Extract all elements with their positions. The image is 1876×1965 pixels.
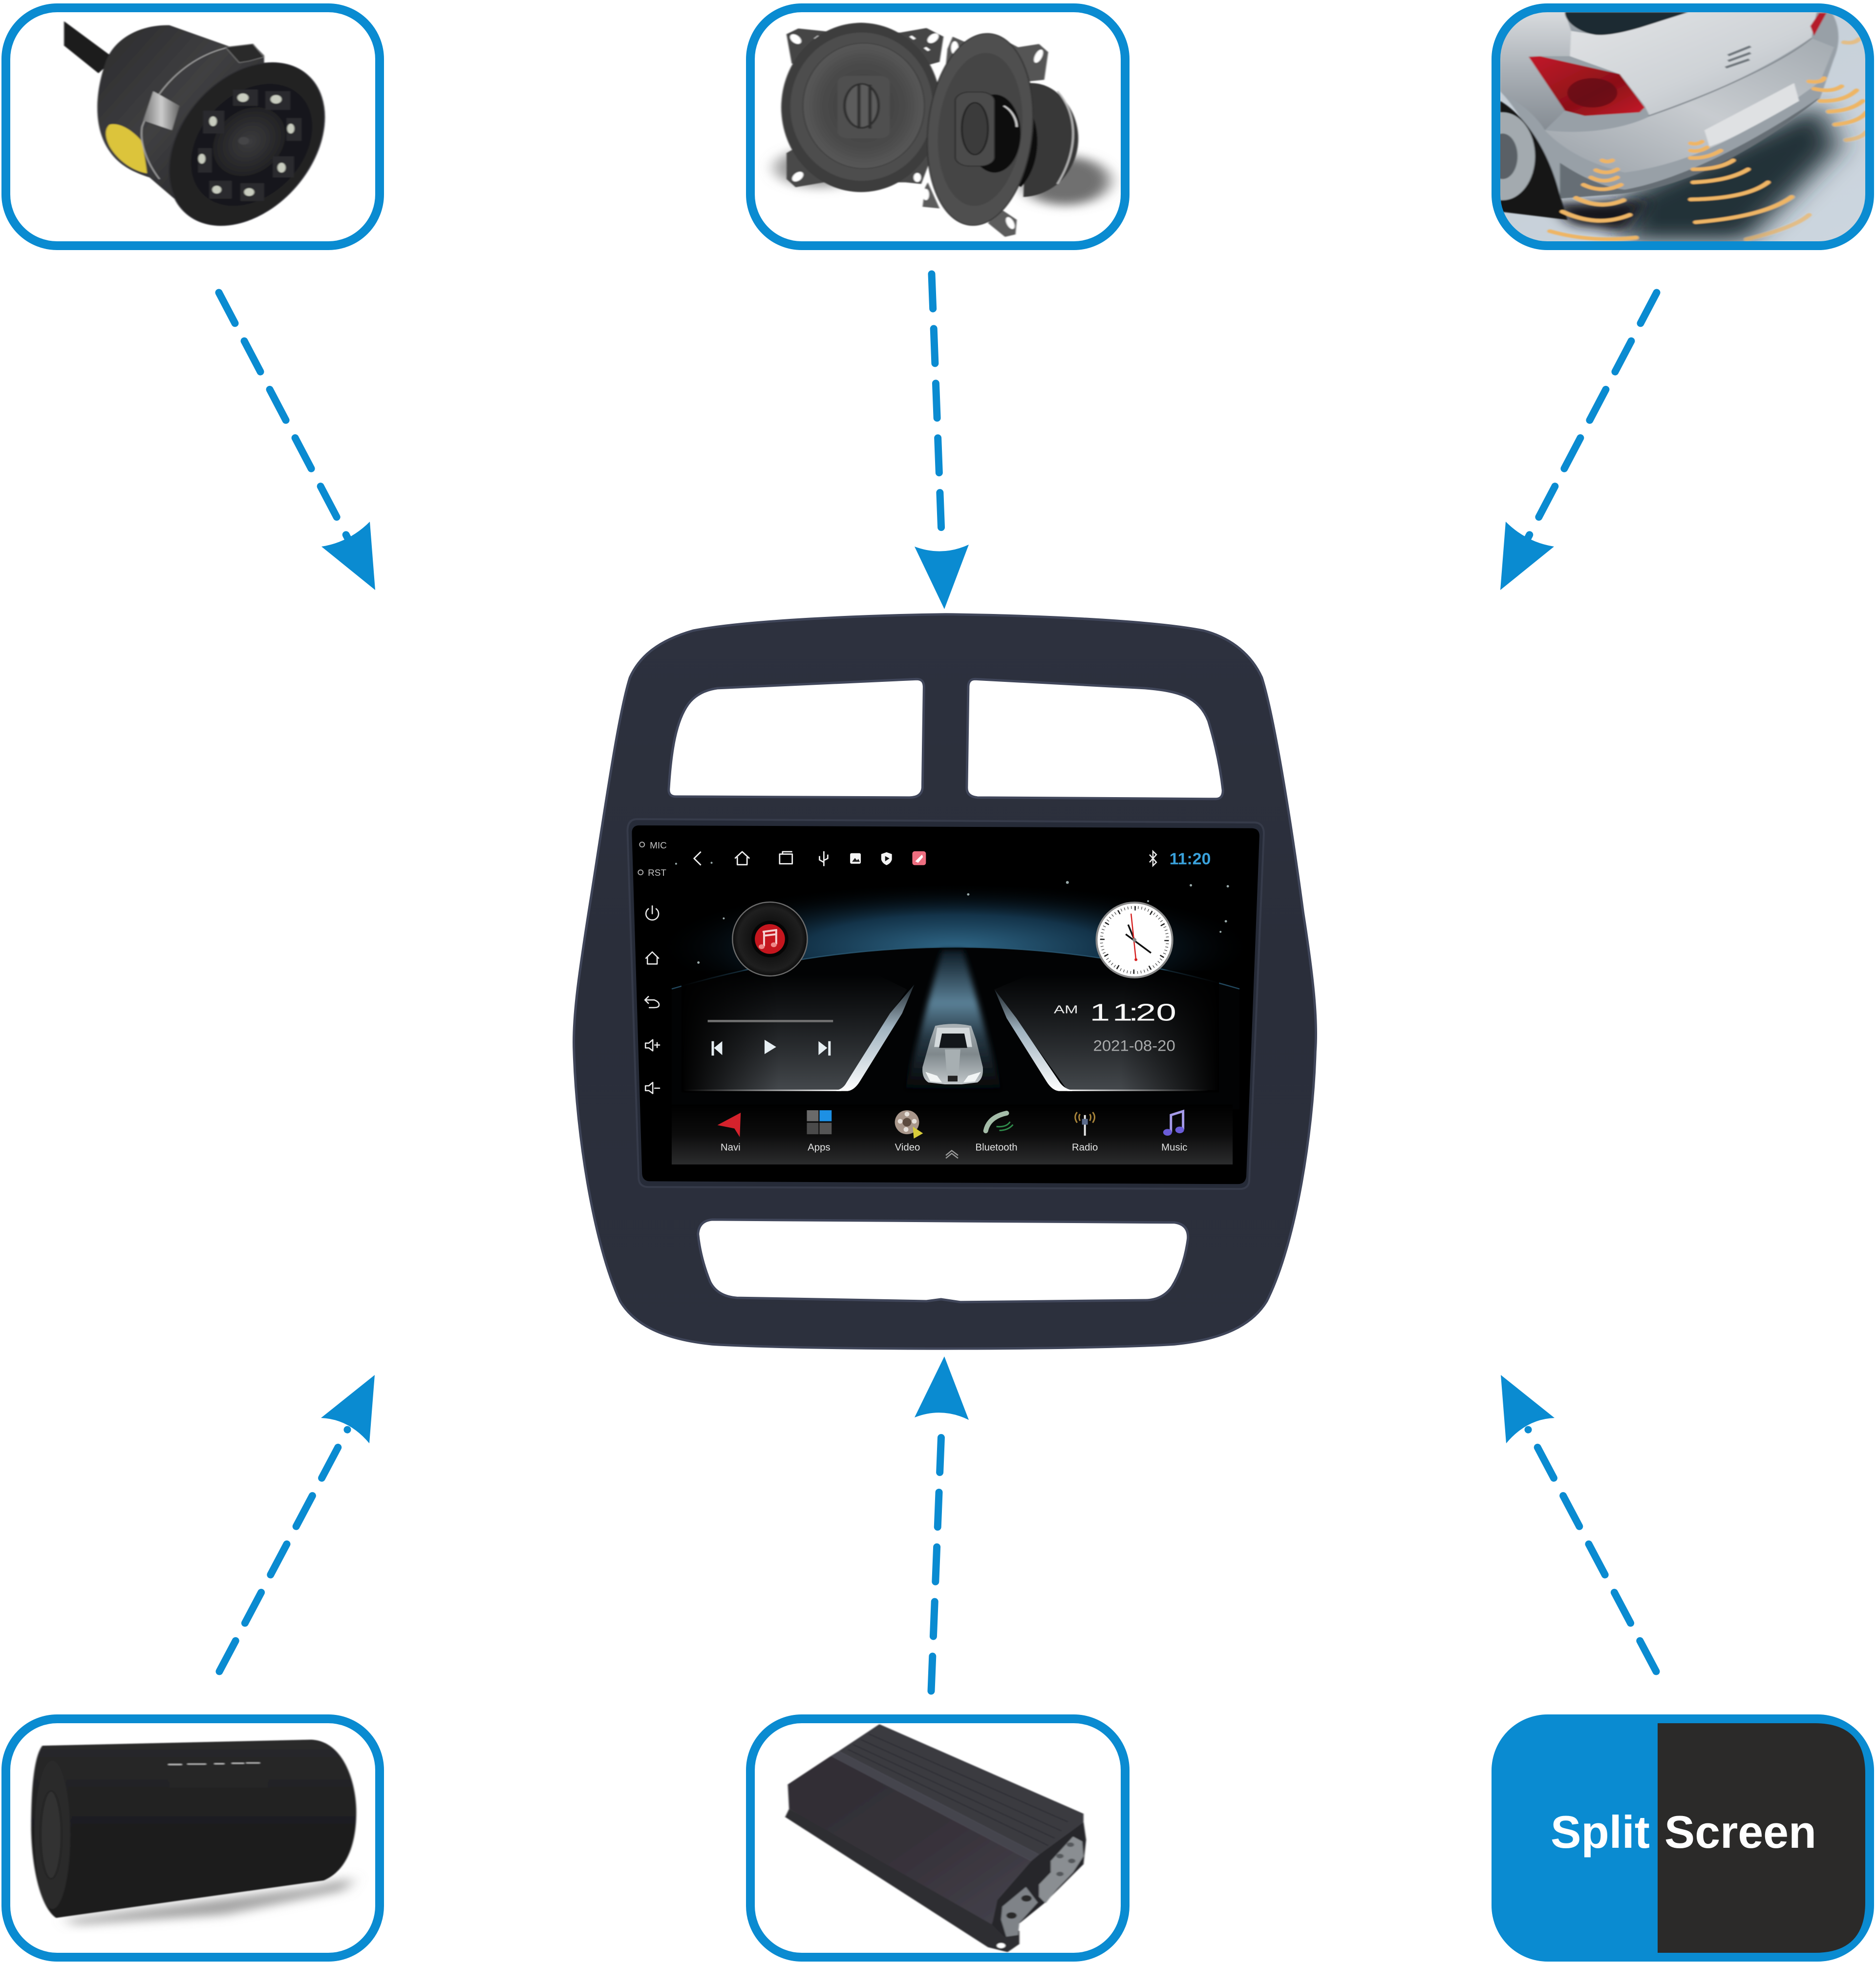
icon: analog clock bbox=[1097, 903, 1172, 977]
card: subwoofer tube bbox=[6, 1719, 380, 1957]
arrow: top-center bbox=[915, 274, 969, 609]
status bar filled icons bbox=[850, 851, 926, 865]
dock app: Apps bbox=[807, 1110, 831, 1153]
panel: dashboard fascia frame bbox=[574, 614, 1316, 1349]
music controls bbox=[712, 1040, 831, 1056]
card: split screen bbox=[1492, 1714, 1874, 1962]
arrow: top-right bbox=[1500, 293, 1657, 590]
icon: subwoofer bbox=[31, 1740, 356, 1924]
icon: car rear with parking sensors bbox=[1470, 12, 1866, 241]
card: amplifier bbox=[750, 1719, 1125, 1957]
dock app: Video: Video bbox=[895, 1142, 920, 1153]
card border bbox=[6, 8, 380, 246]
arrow: top-left bbox=[219, 293, 375, 590]
stars bbox=[675, 862, 1229, 964]
icon: vinyl record bbox=[732, 902, 808, 976]
side button icons bbox=[645, 906, 660, 1094]
status bar icons bbox=[694, 851, 828, 866]
split screen dark half bbox=[1658, 1723, 1865, 1953]
dock app: Radio bbox=[1072, 1112, 1098, 1153]
card border bbox=[1496, 8, 1870, 246]
arrow: bottom-left bbox=[219, 1375, 375, 1671]
dock app: Video bbox=[895, 1110, 923, 1153]
dock background bbox=[672, 1125, 1233, 1164]
card border bbox=[750, 1719, 1125, 1957]
card: parking sensors bbox=[1470, 8, 1870, 246]
label: Split: Split bbox=[1551, 1806, 1650, 1858]
arrow: bottom-center bbox=[915, 1356, 969, 1691]
indicator: RST: RST bbox=[648, 867, 666, 878]
arrow: bottom-right bbox=[1501, 1375, 1656, 1671]
AM label: AM bbox=[1054, 1004, 1078, 1016]
icon: sports car bbox=[922, 1024, 983, 1084]
music progress bar bbox=[708, 1020, 833, 1022]
indicator: RST bbox=[638, 869, 666, 876]
icon: amplifier bbox=[785, 1724, 1086, 1952]
card: coaxial speakers bbox=[750, 8, 1125, 246]
date: 2021-08-20 bbox=[1093, 1036, 1175, 1054]
dock app: Navi: Navi bbox=[721, 1142, 741, 1153]
icon: backup camera bbox=[63, 21, 326, 227]
card: backup camera bbox=[6, 8, 380, 246]
status clock: 11:20 bbox=[1170, 850, 1211, 868]
dock app: Apps: Apps bbox=[808, 1142, 831, 1153]
label: Screen: Screen bbox=[1664, 1806, 1816, 1858]
chevron handle bbox=[946, 1151, 958, 1158]
panel: touchscreen display bbox=[630, 824, 1262, 1186]
head unit: dashboard frame and screen bbox=[574, 614, 1316, 1349]
card border bbox=[6, 1719, 380, 1957]
indicator: MIC bbox=[639, 842, 666, 848]
dock app: Bluetooth: Bluetooth bbox=[976, 1142, 1018, 1153]
dock app: Music: Music bbox=[1161, 1142, 1187, 1153]
dock app: Music bbox=[1161, 1111, 1187, 1153]
large time: 11:20 bbox=[1090, 999, 1176, 1026]
panel: screen bezel bbox=[627, 819, 1264, 1189]
card border bbox=[750, 8, 1125, 246]
dock app: Radio: Radio bbox=[1072, 1142, 1098, 1153]
icon: speakers bbox=[775, 23, 1109, 237]
icon: bluetooth bbox=[1150, 851, 1156, 866]
dock app: Navi bbox=[717, 1113, 741, 1153]
dock app: Bluetooth bbox=[976, 1113, 1018, 1153]
indicator: MIC: MIC bbox=[650, 840, 667, 850]
